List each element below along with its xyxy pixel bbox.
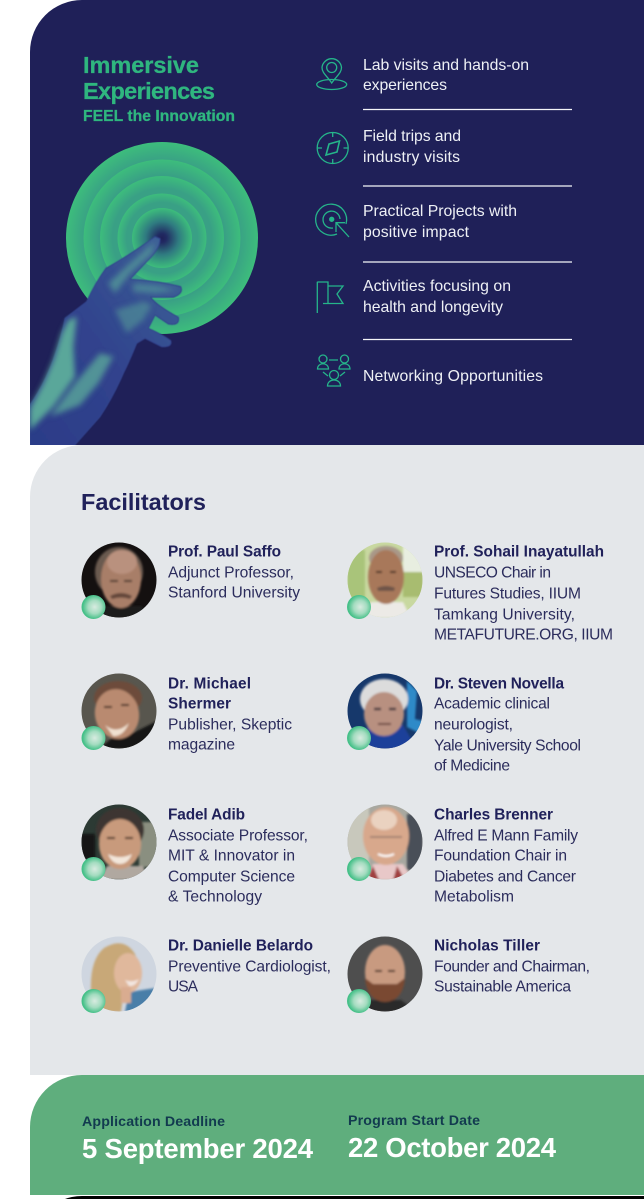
badge [82,726,106,750]
text: Sohail Inayatullah: Prof. Sohail Inayatullah [434,544,604,561]
text: Michael Shermer: Shermer [168,696,231,713]
portrait: Paul Saffo [81,542,157,618]
illustration: concentric circles [66,142,258,334]
text: Steven Novella: of Medicine [434,758,510,775]
badge [347,857,371,881]
item: health activities: Activities focusing on [363,278,511,295]
item: field trips: Field trips and [363,128,461,145]
text: Charles Brenner [434,807,578,906]
item: health activities [317,278,511,316]
text: Charles Brenner: Alfred E Mann Family [434,828,578,845]
text: Nicholas Tiller [434,938,590,996]
text: Michael Shermer [168,676,292,754]
item: practical projects: Practical Projects with [363,203,517,220]
badge [347,726,371,750]
text: Sohail Inayatullah: UNSECO Chair in [434,565,551,582]
heading: immersive experiences [83,52,235,125]
text: Paul Saffo: Stanford University [168,585,300,602]
text: Steven Novella: Dr. Steven Novella [434,676,564,693]
text: Steven Novella: Yale University School [434,738,581,755]
date: application deadline: 5 September 2024 [82,1133,314,1164]
text: Nicholas Tiller: Nicholas Tiller [434,938,540,955]
item: networking [318,355,543,386]
text: Fadel Adib: Computer Science [168,869,295,886]
text: Fadel Adib: MIT & Innovator in [168,848,295,865]
item: practical projects: positive impact [363,224,470,241]
heading: immersive experiences: Immersive [83,52,199,78]
text: Paul Saffo: Prof. Paul Saffo [168,544,281,561]
date: application deadline [82,1114,314,1164]
illustration: hand [30,237,181,447]
facilitator: Charles Brenner [347,804,578,906]
facilitator: Sohail Inayatullah [347,542,613,644]
portrait: Nicholas Tiller [347,936,423,1012]
panel: key dates [30,1075,644,1195]
item: lab visits [317,57,529,94]
facilitator: Fadel Adib [81,804,308,906]
text: Michael Shermer: magazine [168,737,235,754]
text: Charles Brenner: Diabetes and Cancer [434,869,576,886]
facilitator: Nicholas Tiller [347,936,590,1013]
text: Steven Novella: Academic clinical [434,696,550,713]
text: Charles Brenner: Charles Brenner [434,807,553,824]
portrait: Michael Shermer [81,673,157,749]
text: Steven Novella: neurologist, [434,717,513,734]
item: health activities: health and longevity [363,299,503,316]
icon: flag [317,282,343,313]
portrait: Danielle Belardo [81,936,157,1012]
date: program start: 22 October 2024 [348,1132,557,1163]
text: Sohail Inayatullah: METAFUTURE.ORG, IIUM [434,627,613,644]
facilitator: Steven Novella [347,673,581,775]
text: Steven Novella [434,676,581,775]
text: Danielle Belardo: Preventive Cardiologist, [168,959,331,976]
text: Danielle Belardo: Dr. Danielle Belardo [168,938,313,955]
badge [347,595,371,619]
text: Danielle Belardo: USA [168,979,199,996]
text: Fadel Adib [168,807,308,906]
badge [82,595,106,619]
date: application deadline: Application Deadline [82,1114,225,1130]
portrait: Sohail Inayatullah [347,542,423,618]
item: field trips: industry visits [363,149,460,166]
badge [82,857,106,881]
portrait: Fadel Adib [81,804,159,880]
facilitator: Danielle Belardo [81,936,331,1013]
text: Nicholas Tiller: Founder and Chairman, [434,959,590,976]
next panel edge [30,1196,644,1199]
text: Nicholas Tiller: Sustainable America [434,979,571,996]
text: Paul Saffo [168,544,300,602]
icon: target with arrow [316,204,349,237]
text: Fadel Adib: Associate Professor, [168,828,308,845]
text: Charles Brenner: Metabolism [434,889,514,906]
panel: immersive experiences [30,0,644,447]
icon: map pin [317,59,347,90]
text: Paul Saffo: Adjunct Professor, [168,565,294,582]
list: experiences [316,57,543,386]
badge [82,989,106,1013]
panel: facilitators [30,445,644,1075]
date: program start: Program Start Date [348,1113,480,1129]
badge [347,989,371,1013]
item: networking: Networking Opportunities [363,368,543,385]
text: Michael Shermer: Dr. Michael [168,676,251,693]
item: lab visits: experiences [363,77,447,94]
text: Michael Shermer: Publisher, Skeptic [168,717,292,734]
facilitator: Paul Saffo [81,542,300,619]
item: field trips [317,128,461,166]
text: Sohail Inayatullah: Futures Studies, IIUM [434,586,581,603]
item: practical projects [316,203,517,241]
heading: immersive experiences: Experiences [83,78,215,104]
date: program start [348,1113,557,1163]
icon: compass [317,132,348,164]
text: Charles Brenner: Foundation Chair in [434,848,567,865]
text: Sohail Inayatullah: Tamkang University, [434,607,575,624]
heading: immersive experiences: FEEL the Innovation [83,108,235,125]
text: Fadel Adib: & Technology [168,889,262,906]
portrait: Steven Novella [347,673,423,749]
icon: people network [318,355,350,386]
text: Sohail Inayatullah [434,544,613,644]
heading: facilitators: Facilitators [81,489,206,515]
facilitator: Michael Shermer [81,673,292,754]
text: Danielle Belardo [168,938,331,996]
item: lab visits: Lab visits and hands-on [363,57,529,74]
text: Fadel Adib: Fadel Adib [168,807,245,824]
portrait: Charles Brenner [347,804,423,880]
